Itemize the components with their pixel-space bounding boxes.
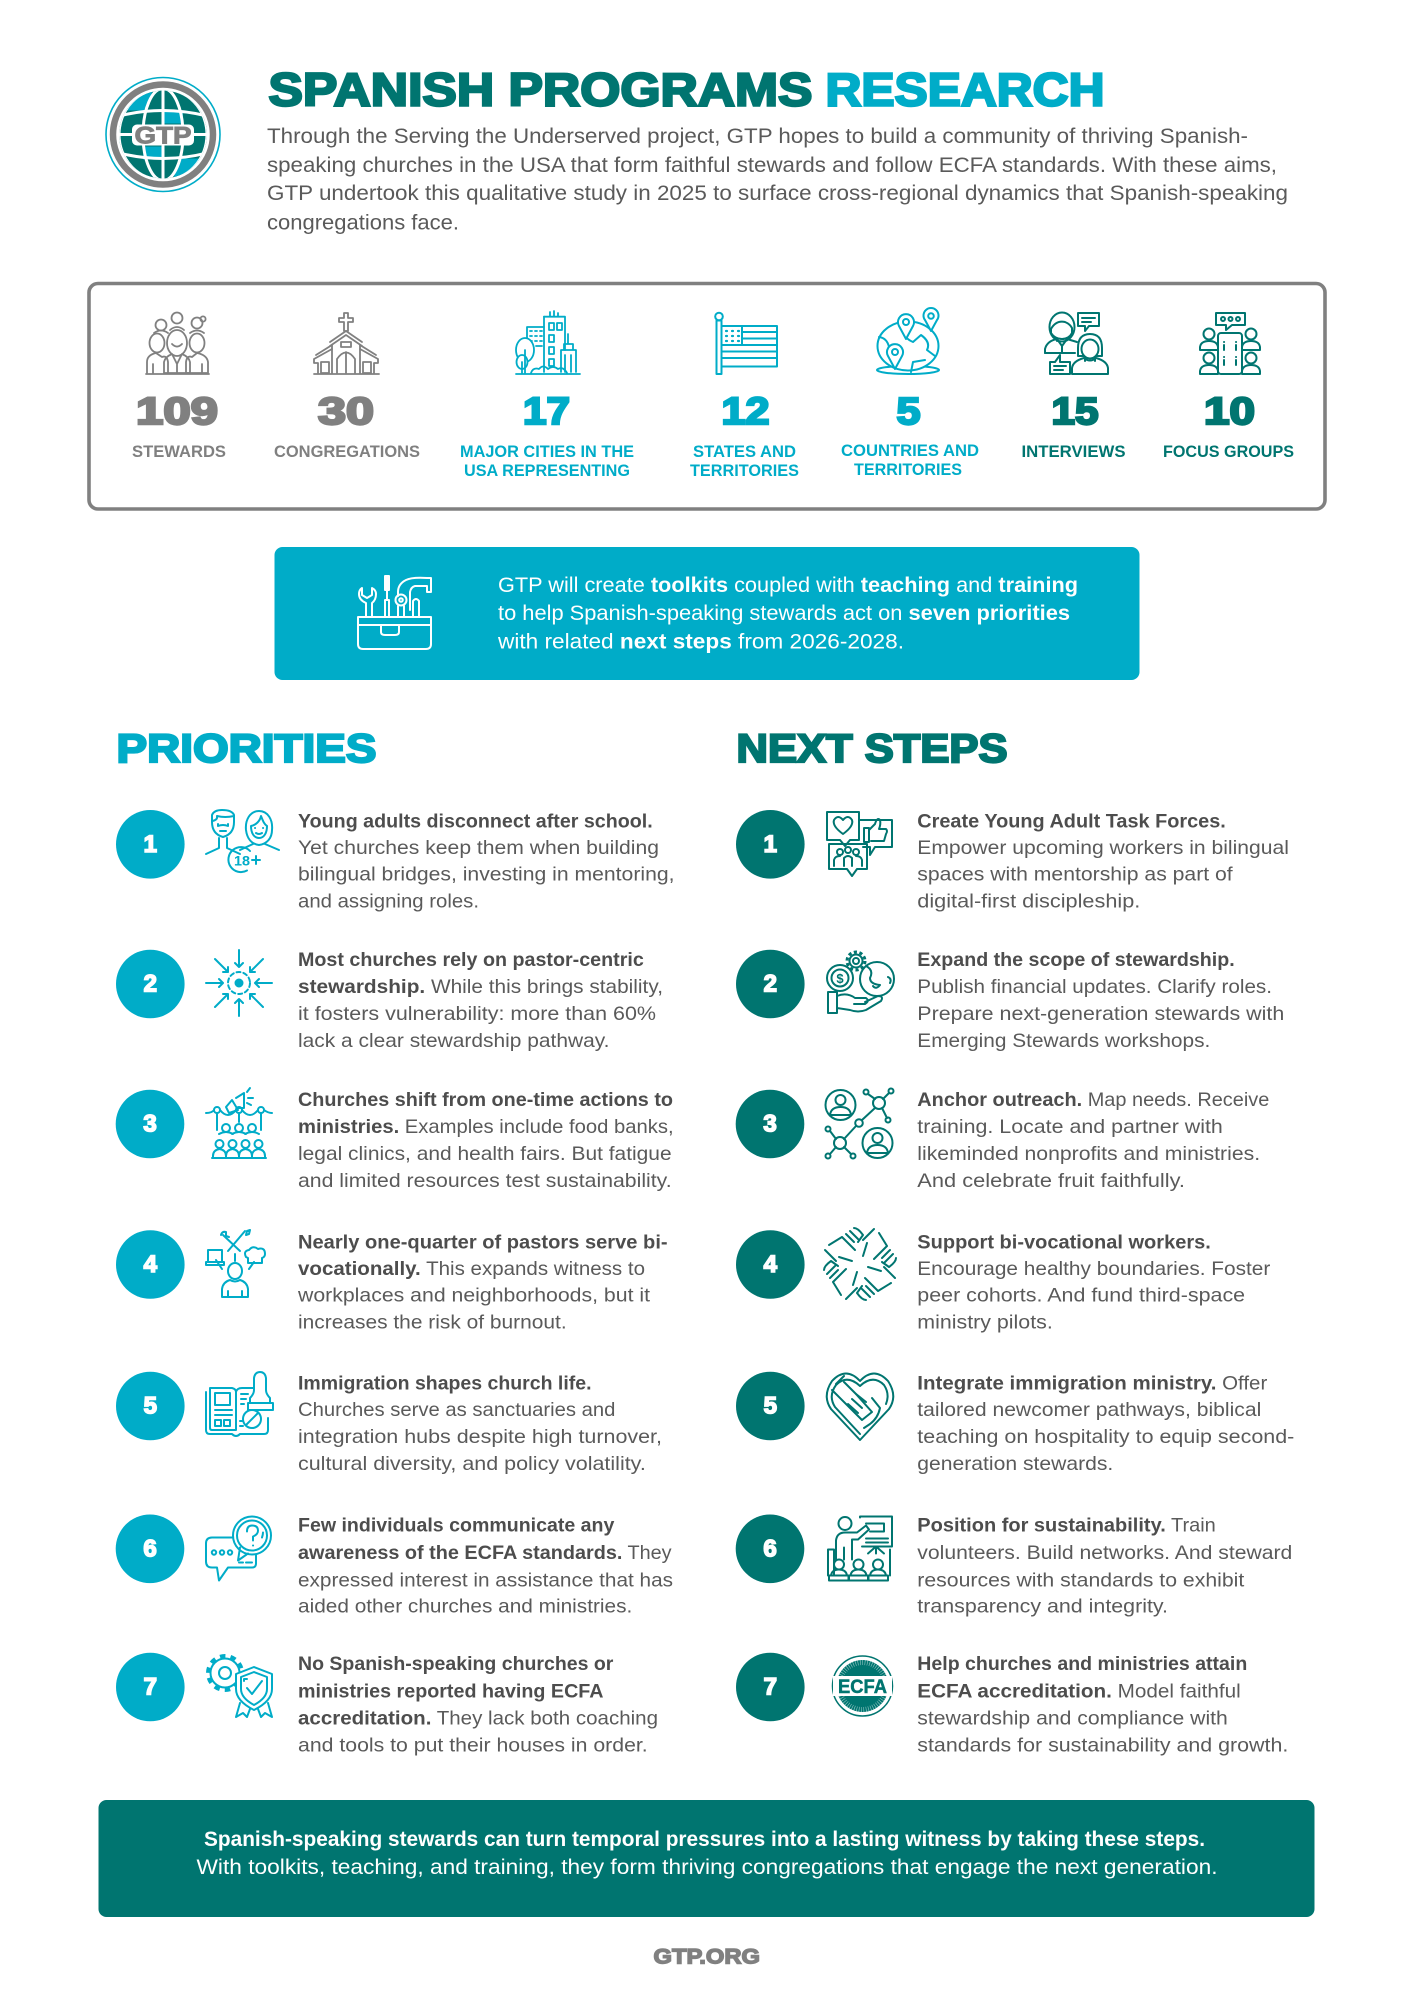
text: increases the risk of burnout. (298, 1312, 567, 1334)
next step 7 (736, 1653, 1288, 1756)
icon: people network (826, 1088, 894, 1158)
text (917, 949, 1284, 1052)
priority 7 (116, 1653, 658, 1756)
icon: interview (1045, 312, 1108, 374)
number: 109 (136, 391, 218, 433)
next step 5 (736, 1372, 1294, 1475)
next step 6 (736, 1514, 1292, 1618)
text: training. Locate and partner with (917, 1116, 1223, 1138)
text: Few individuals communicate any (298, 1514, 615, 1536)
footer: website: GTP.ORG (654, 1944, 760, 1968)
text: lack a clear stewardship pathway. (298, 1030, 610, 1052)
label: STEWARDS (132, 442, 226, 461)
icon: hand with coin, globe and gear: $ (836, 971, 844, 986)
label: USA REPRESENTING (464, 461, 630, 480)
label (690, 442, 799, 480)
text (298, 1372, 662, 1475)
text: Nearly one-quarter of pastors serve bi- (298, 1232, 668, 1254)
text: and tools to put their houses in order. (298, 1734, 648, 1756)
text (917, 1372, 1294, 1475)
priority 5 (116, 1372, 662, 1475)
text: Empower upcoming workers in bilingual (917, 837, 1289, 859)
number badge: 2 (764, 970, 777, 998)
text: resources with standards to exhibit (917, 1570, 1245, 1592)
icon: gear and shield (208, 1656, 272, 1717)
text (298, 1653, 658, 1756)
icon: church (314, 313, 379, 374)
number badge: 3 (143, 1110, 157, 1138)
text: Create Young Adult Task Forces. (917, 810, 1226, 832)
title: SPANISH PROGRAMS (268, 64, 812, 116)
number badge: 3 (763, 1110, 777, 1138)
number badge (116, 1514, 184, 1583)
conclusion text (196, 1828, 1218, 1879)
priority 2 (116, 949, 663, 1052)
text: Position for sustainability. Train (917, 1514, 1216, 1536)
icon: inward arrows (206, 950, 272, 1016)
intro text block: congregations face. (267, 210, 459, 234)
number badge: 4 (144, 1251, 158, 1278)
text: Most churches rely on pastor-centric (298, 949, 644, 971)
text: workplaces and neighborhoods, but it (297, 1284, 651, 1306)
panel: study statistics (89, 284, 1325, 509)
text: Prepare next-generation stewards with (917, 1003, 1284, 1025)
next step 1 (736, 810, 1289, 912)
priority 4 (116, 1230, 668, 1334)
intro text block: speaking churches in the USA that form faithful stewards and follow ECFA standards. With these aims, (267, 153, 1277, 177)
text: Help churches and ministries attain (917, 1653, 1247, 1675)
text: ministries. Examples include food banks, (298, 1116, 674, 1138)
text: integration hubs despite high turnover, (298, 1426, 662, 1448)
label: COUNTRIES AND (841, 441, 979, 460)
number badge (116, 1230, 185, 1299)
text: vocationally. This expands witness to (298, 1258, 645, 1280)
text: Emerging Stewards workshops. (917, 1030, 1210, 1052)
icon: presenter and audience (828, 1516, 892, 1580)
number badge: 2 (144, 970, 157, 998)
number badge (736, 1514, 804, 1583)
text: standards for sustainability and growth. (917, 1734, 1288, 1756)
text (917, 1514, 1292, 1618)
next step 4 (736, 1228, 1271, 1334)
number badge (736, 1230, 805, 1299)
intro text block: GTP undertook this qualitative study in 2025 to surface cross-regional dynamics that Spanish-speaking (267, 181, 1288, 205)
next step 2 (736, 949, 1284, 1052)
icon: bi-vocational person (206, 1230, 265, 1297)
text: No Spanish-speaking churches or (298, 1653, 614, 1675)
stat: 30 congregations (274, 313, 420, 461)
stat: 5 countries and territories (841, 308, 979, 479)
number badge (116, 810, 185, 879)
icon: ministry crowd (206, 1088, 272, 1158)
icon: heart with hands (827, 1374, 893, 1440)
text (298, 1514, 673, 1618)
number badge (736, 1090, 804, 1158)
label: MAJOR CITIES IN THE (460, 442, 634, 461)
text: ECFA accreditation. Model faithful (917, 1680, 1241, 1702)
label (460, 442, 634, 480)
callout text (497, 574, 1078, 654)
text: aided other churches and ministries. (298, 1596, 632, 1618)
text (298, 810, 674, 912)
text: Immigration shapes church life. (298, 1372, 592, 1394)
icon: hand with coin, globe and gear (827, 952, 894, 1013)
label: TERRITORIES (854, 460, 962, 479)
stat: 10 focus groups (1163, 313, 1294, 461)
icon: globe with pins (877, 308, 939, 374)
text: tailored newcomer pathways, biblical (917, 1399, 1261, 1421)
number: 30 (318, 391, 374, 433)
number badge: 1 (764, 831, 777, 858)
label: CONGREGATIONS (274, 442, 420, 461)
stat: 17 major cities (460, 311, 634, 480)
number badge (736, 1653, 805, 1721)
text: Churches serve as sanctuaries and (298, 1399, 615, 1421)
text: legal clinics, and health fairs. But fatigue (298, 1143, 672, 1165)
text (297, 1232, 668, 1334)
number badge: 7 (144, 1674, 157, 1700)
number badge (116, 1090, 184, 1158)
text: Encourage healthy boundaries. Foster (917, 1258, 1271, 1280)
number badge (736, 810, 805, 879)
text: Churches shift from one-time actions to (298, 1089, 673, 1111)
label: INTERVIEWS (1022, 442, 1126, 461)
text: volunteers. Build networks. And steward (917, 1542, 1292, 1564)
text: Yet churches keep them when building (298, 837, 659, 859)
icon: focus group (1200, 313, 1260, 374)
text: accreditation. They lack both coaching (298, 1708, 658, 1730)
stat: 109 stewards (132, 312, 226, 461)
callout: conclusion (98, 1800, 1314, 1917)
text: Anchor outreach. Map needs. Receive (917, 1089, 1269, 1111)
conclusion text: Spanish-speaking stewards can turn temporal pressures into a lasting witness by taking these steps. (204, 1828, 1205, 1851)
text (298, 1089, 674, 1192)
text: expressed interest in assistance that has (298, 1570, 673, 1592)
label: TERRITORIES (690, 461, 799, 480)
callout text: to help Spanish-speaking stewards act on seven priorities (498, 602, 1070, 625)
text: and assigning roles. (298, 890, 479, 912)
number badge: 1 (144, 831, 157, 858)
text: digital-first discipleship. (917, 890, 1140, 912)
text: Young adults disconnect after school. (298, 810, 653, 832)
text: transparency and integrity. (917, 1596, 1168, 1618)
number badge (736, 1372, 805, 1440)
number: 12 (722, 391, 770, 433)
number badge (116, 1653, 185, 1721)
icon: speech bubble with question (206, 1516, 271, 1580)
text: cultural diversity, and policy volatility. (298, 1453, 646, 1475)
number badge: 6 (143, 1536, 157, 1562)
callout text: with related next steps from 2026-2028. (497, 630, 904, 654)
number badge (736, 950, 805, 1018)
icon: passport and stamp (206, 1372, 273, 1436)
icon: ECFA seal (832, 1656, 892, 1716)
text: it fosters vulnerability: more than 60% (298, 1003, 656, 1025)
icon: city (516, 311, 580, 374)
icon: GTP globe logo (106, 78, 220, 192)
icon: ECFA seal: ECFA (838, 1677, 887, 1698)
title (268, 64, 1104, 116)
text (917, 810, 1289, 912)
number badge: 5 (144, 1392, 157, 1420)
number: 5 (896, 391, 920, 433)
heading: priorities: PRIORITIES (116, 727, 376, 771)
number badge: 7 (764, 1674, 777, 1700)
number badge (116, 950, 185, 1018)
number badge: 4 (764, 1251, 778, 1278)
text: spaces with mentorship as part of (917, 864, 1233, 886)
priority 3 (116, 1088, 674, 1192)
callout: toolkits (274, 547, 1140, 680)
text: bilingual bridges, investing in mentoring, (298, 864, 674, 886)
text: teaching on hospitality to equip second- (917, 1426, 1294, 1448)
text: likeminded nonprofits and ministries. (917, 1143, 1260, 1165)
label: FOCUS GROUPS (1163, 442, 1294, 461)
text: stewardship and compliance with (917, 1708, 1228, 1730)
text: awareness of the ECFA standards. They (298, 1542, 672, 1564)
priority 1 (116, 810, 674, 912)
stat: 12 states and territories (690, 313, 799, 480)
number: 17 (523, 391, 570, 433)
icon: toolbox (358, 576, 431, 649)
label (841, 441, 979, 479)
icon: GTP globe logo: GTP (134, 122, 192, 150)
text: stewardship. While this brings stability, (298, 976, 663, 998)
text (917, 1653, 1288, 1756)
label: STATES AND (693, 442, 796, 461)
icon: stewards group (146, 312, 209, 374)
priority 6 (116, 1514, 673, 1618)
heading: next steps: NEXT STEPS (736, 727, 1008, 771)
text: ministry pilots. (917, 1312, 1053, 1334)
number: 10 (1204, 391, 1255, 433)
text: Publish financial updates. Clarify roles. (917, 976, 1272, 998)
text: and limited resources test sustainability. (298, 1170, 672, 1192)
icon: social bubbles (827, 812, 892, 876)
number badge: 5 (764, 1392, 777, 1420)
text (298, 949, 663, 1052)
number: 15 (1052, 391, 1098, 433)
next step 3 (736, 1088, 1269, 1192)
icon: young adults 18+: 18 (234, 852, 250, 868)
text (917, 1089, 1269, 1192)
text (917, 1232, 1271, 1334)
text: peer cohorts. And fund third-space (917, 1284, 1245, 1306)
callout text: GTP will create toolkits coupled with teaching and training (498, 574, 1078, 597)
number badge (116, 1372, 185, 1440)
text: And celebrate fruit faithfully. (917, 1170, 1185, 1192)
stat: 15 interviews (1022, 312, 1126, 461)
intro text block: Through the Serving the Underserved project, GTP hopes to build a community of thriving Spanish- (267, 124, 1248, 148)
text: Expand the scope of stewardship. (917, 949, 1235, 971)
conclusion text: With toolkits, teaching, and training, they form thriving congregations that engage the next generation. (196, 1856, 1218, 1879)
text: Support bi-vocational workers. (917, 1232, 1211, 1254)
intro text block (267, 124, 1288, 234)
title: RESEARCH (826, 64, 1104, 116)
icon: young adults 18+ (206, 810, 279, 872)
icon: flag (715, 313, 777, 374)
text: ministries reported having ECFA (298, 1680, 604, 1702)
icon: clasped hands (824, 1228, 896, 1300)
text: generation stewards. (917, 1453, 1113, 1475)
text: Integrate immigration ministry. Offer (917, 1372, 1268, 1394)
number badge: 6 (763, 1536, 777, 1562)
